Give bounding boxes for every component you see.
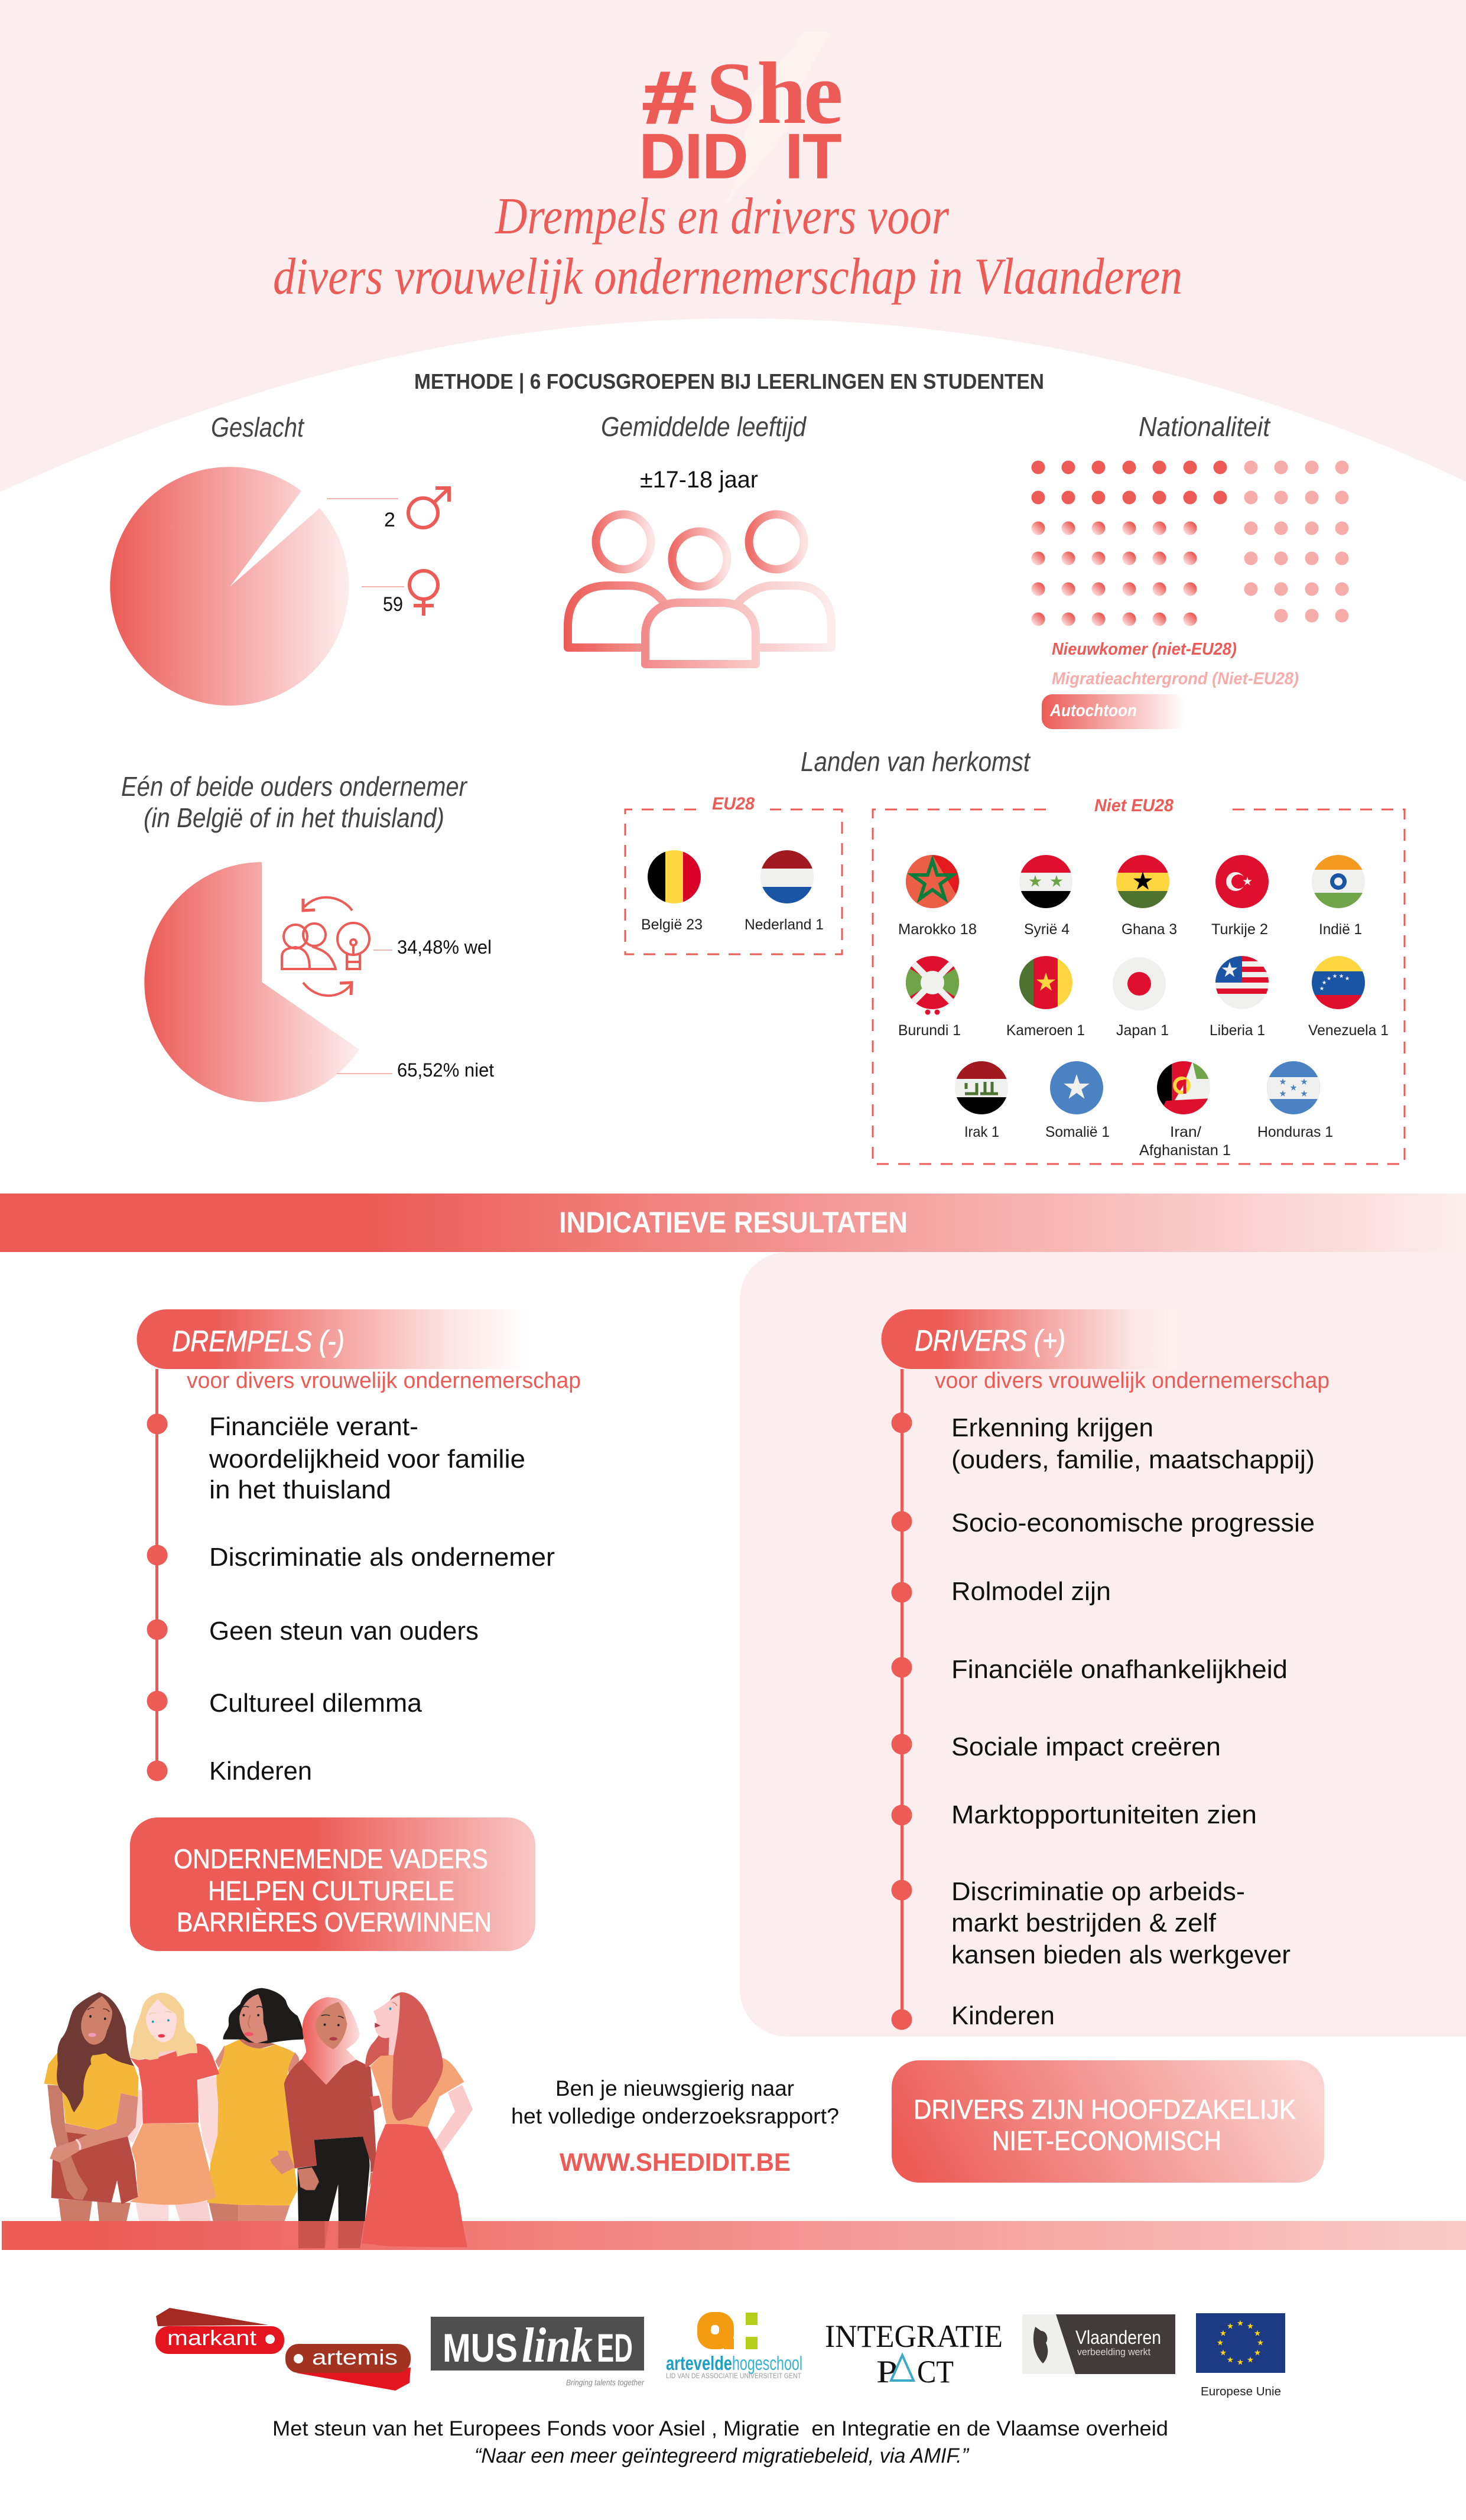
flag labels: Burundi 1	[898, 1022, 961, 1039]
heading: nationaliteit: Nationaliteit	[1139, 411, 1271, 442]
hero background	[0, 0, 1466, 532]
list: drivers: (ouders, familie, maatschappij)	[951, 1445, 1315, 1474]
panel: drivers	[882, 1309, 1330, 2030]
call to action text	[511, 2076, 839, 2177]
logo: muslinked	[431, 2317, 645, 2387]
list: drivers: Rolmodel zijn	[951, 1577, 1111, 1606]
call to action text: WWW.SHEDIDIT.BE	[560, 2148, 791, 2177]
flag labels: Indië 1	[1319, 921, 1362, 938]
banner: indicatieve resultaten: INDICATIEVE RESULTATEN	[559, 1206, 908, 1239]
list: drempels: Geen steun van ouders	[209, 1617, 479, 1646]
flag labels: België 23	[641, 916, 703, 933]
flag: België	[648, 850, 701, 903]
logo: muslinked: link	[522, 2318, 593, 2373]
legend: Migratieachtergrond (Niet-EU28)	[1052, 669, 1299, 688]
logo: integratie pact: P	[876, 2354, 898, 2389]
flag labels: Honduras 1	[1257, 1124, 1333, 1140]
icon: people	[568, 514, 831, 664]
logo: She Did It: #	[642, 57, 696, 139]
heading: ouders ondernemer	[121, 771, 467, 833]
flag labels: Irak 1	[964, 1124, 999, 1140]
callout: vaders	[130, 1817, 535, 1951]
flag: Ghana	[1116, 855, 1169, 908]
callout: drivers niet-economisch: DRIVERS ZIJN HOOFDZAKELIJK	[914, 2094, 1296, 2125]
logo: vlaanderen	[1022, 2314, 1175, 2374]
flag labels: Liberia 1	[1210, 1022, 1265, 1039]
label: mannen: 2	[384, 509, 395, 531]
legend: Nieuwkomer (niet-EU28)	[1052, 640, 1237, 659]
benen door de band	[298, 2221, 364, 2248]
logo: She Did It: She	[706, 44, 843, 142]
list: drivers: kansen bieden als werkgever	[951, 1940, 1291, 1969]
panel: nationaliteit	[1032, 411, 1348, 729]
logo: arteveldehogeschool: LID VAN DE ASSOCIATIE UNIVERSITEIT GENT	[666, 2372, 802, 2380]
legend	[1042, 640, 1299, 729]
subheading: drivers: voor divers vrouwelijk ondernemerschap	[935, 1368, 1330, 1393]
heading: landen van herkomst: Landen van herkomst	[801, 746, 1031, 777]
panel: gemiddelde leeftijd	[568, 411, 831, 664]
icon: ouders en lamp	[282, 898, 369, 996]
logo: artemis	[285, 2344, 411, 2391]
list: drivers	[951, 1413, 1315, 2030]
vrouw 4	[270, 1997, 377, 2221]
call to action text: Ben je nieuwsgierig naar	[555, 2076, 794, 2100]
flag labels: Venezuela 1	[1308, 1022, 1389, 1039]
panel: ouders ondernemer	[121, 771, 494, 1102]
flag labels: Marokko 18	[898, 921, 977, 938]
list: drempels: woordelijkheid voor familie	[209, 1445, 525, 1474]
header: drempels	[137, 1309, 528, 1369]
logo: arteveldehogeschool: artevelde	[666, 2352, 732, 2374]
logo: vlaanderen: verbeelding werkt	[1077, 2346, 1150, 2358]
list: drivers: Erkenning krijgen	[951, 1413, 1153, 1442]
list: drivers: Discriminatie op arbeids-	[951, 1877, 1245, 1906]
flag: Kameroen	[1019, 956, 1072, 1009]
logo: integratie pact	[825, 2319, 1003, 2389]
panel: drivers background	[740, 1252, 1466, 2037]
vrouw 2	[128, 1993, 219, 2221]
flag labels: Syrië 4	[1024, 921, 1070, 938]
flag: Japan	[1113, 957, 1166, 1010]
flag labels: Turkije 2	[1211, 921, 1268, 938]
subtitle	[273, 188, 1182, 305]
pie chart: geslacht	[110, 467, 349, 705]
logo: muslinked: ED	[597, 2326, 633, 2371]
logo: markant	[155, 2308, 284, 2354]
heading: ouders ondernemer: (in België of in het thuisland)	[144, 802, 444, 833]
callout: vaders: HELPEN CULTURELE	[208, 1875, 454, 1906]
list: drivers: Marktopportuniteiten zien	[951, 1800, 1257, 1829]
subtitle: divers vrouwelijk ondernemerschap in Vlaanderen	[273, 248, 1182, 305]
list: drempels: Kinderen	[209, 1757, 312, 1786]
flag: Irak	[955, 1061, 1008, 1114]
label: vrouwen	[362, 571, 438, 616]
label: vrouwen: 59	[383, 593, 403, 616]
logo: vlaanderen: Vlaanderen	[1075, 2327, 1161, 2348]
list: drivers: Kinderen	[951, 2001, 1055, 2030]
logo: markant: markant	[167, 2326, 256, 2350]
logo: She Did It	[639, 32, 843, 207]
flag labels: Afghanistan 1	[1139, 1142, 1231, 1159]
callout: drivers niet-economisch: NIET-ECONOMISCH	[992, 2125, 1221, 2156]
dot chart	[1032, 461, 1348, 626]
panel: landen van herkomst	[625, 746, 1405, 1164]
logo: artemis: artemis	[312, 2345, 398, 2369]
list: drempels: Financiële verant-	[209, 1412, 418, 1441]
callout: vaders: BARRIÈRES OVERWINNEN	[177, 1907, 492, 1937]
panel: geslacht	[110, 412, 449, 705]
call to action text: het volledige onderzoeksrapport?	[511, 2104, 839, 2128]
flag: Honduras	[1267, 1061, 1320, 1114]
heading: geslacht: Geslacht	[211, 412, 305, 443]
header: drivers	[882, 1309, 1177, 1369]
vrouw 1	[44, 1992, 138, 2221]
flag: Iran / Afghanistan	[1157, 1061, 1210, 1114]
list: drivers: Sociale impact creëren	[951, 1732, 1221, 1761]
list: drivers: Financiële onafhankelijkheid	[951, 1655, 1288, 1684]
box: niet EU28	[873, 796, 1405, 1164]
illustration: groep vrouwen	[44, 1988, 473, 2248]
pie chart: ouders	[144, 862, 359, 1102]
logo: europese unie	[1196, 2313, 1285, 2398]
subtitle: Drempels en drivers voor	[495, 188, 950, 245]
logo: arteveldehogeschool: hogeschool	[732, 2352, 802, 2374]
timeline: drempels	[147, 1369, 168, 1781]
logo: arteveldehogeschool	[666, 2312, 802, 2380]
flag: Nederland	[760, 850, 814, 903]
flag: Somalië	[1050, 1061, 1103, 1114]
logo: europese unie: Europese Unie	[1201, 2385, 1281, 2398]
vrouw 3	[207, 1988, 304, 2221]
logo: integratie pact: CT	[917, 2354, 954, 2389]
flag: Venezuela	[1312, 956, 1365, 1009]
box: niet EU28: Niet EU28	[1094, 796, 1174, 815]
vrouw 5	[362, 1992, 473, 2247]
flag labels: Nederland 1	[745, 916, 824, 933]
flag labels: Ghana 3	[1122, 921, 1177, 938]
timeline: drivers	[891, 1369, 912, 2030]
label: mannen	[327, 488, 449, 531]
list: drempels	[209, 1412, 555, 1786]
flag labels: Somalië 1	[1045, 1124, 1110, 1140]
label: niet: 65,52% niet	[397, 1059, 494, 1081]
flag: Indië	[1312, 855, 1365, 908]
list: drempels: Discriminatie als ondernemer	[209, 1543, 555, 1572]
age value: ±17-18 jaar	[640, 467, 758, 493]
callout: vaders: ONDERNEMENDE VADERS	[174, 1843, 488, 1874]
footer text	[272, 2417, 1168, 2467]
callout: drivers niet-economisch	[892, 2060, 1324, 2183]
methode heading: METHODE | 6 FOCUSGROEPEN BIJ LEERLINGEN EN STUDENTEN	[414, 369, 1044, 394]
list: drempels: in het thuisland	[209, 1475, 391, 1504]
panel: drempels	[130, 1309, 581, 1951]
flag labels: Japan 1	[1116, 1022, 1169, 1039]
header: drivers: DRIVERS (+)	[915, 1324, 1065, 1357]
box: EU28: EU28	[712, 794, 755, 814]
subheading: drempels: voor divers vrouwelijk ondernemerschap	[187, 1368, 581, 1393]
list: drempels: Cultureel dilemma	[209, 1689, 422, 1718]
flag: Liberia	[1215, 956, 1269, 1009]
logo: muslinked: MUS	[443, 2326, 518, 2371]
label: wel: 34,48% wel	[397, 937, 492, 958]
logo: muslinked: Bringing talents together	[566, 2378, 645, 2387]
list: drivers: markt bestrijden & zelf	[951, 1908, 1217, 1937]
header: drempels: DREMPELS (-)	[172, 1325, 344, 1358]
box: EU28	[625, 794, 842, 954]
flag: Marokko	[906, 855, 959, 908]
legend: Autochtoon	[1049, 701, 1137, 720]
logo: She Did It: DID	[639, 121, 748, 191]
logo: integratie pact: INTEGRATIE	[825, 2319, 1003, 2354]
footer text: Met steun van het Europees Fonds voor Asiel , Migratie en Integratie en de Vlaamse overheid	[272, 2417, 1168, 2440]
logo: She Did It: IT	[785, 121, 841, 191]
flag: Turkije	[1215, 855, 1269, 908]
flag labels: Kameroen 1	[1006, 1022, 1085, 1039]
flag: Syrië	[1019, 855, 1072, 908]
heading: gemiddelde leeftijd: Gemiddelde leeftijd	[601, 411, 807, 442]
flag labels: Iran/	[1170, 1124, 1201, 1140]
onderste band	[2, 2221, 1466, 2250]
heading: ouders ondernemer: Eén of beide ouders ondernemer	[121, 771, 467, 802]
flag labels	[641, 916, 1389, 1159]
banner: indicatieve resultaten	[0, 1194, 1466, 1252]
footer text: “Naar een meer geïntegreerd migratiebeleid, via AMIF.”	[474, 2444, 969, 2467]
flag: Burundi	[906, 956, 959, 1015]
list: drivers: Socio-economische progressie	[951, 1508, 1315, 1537]
